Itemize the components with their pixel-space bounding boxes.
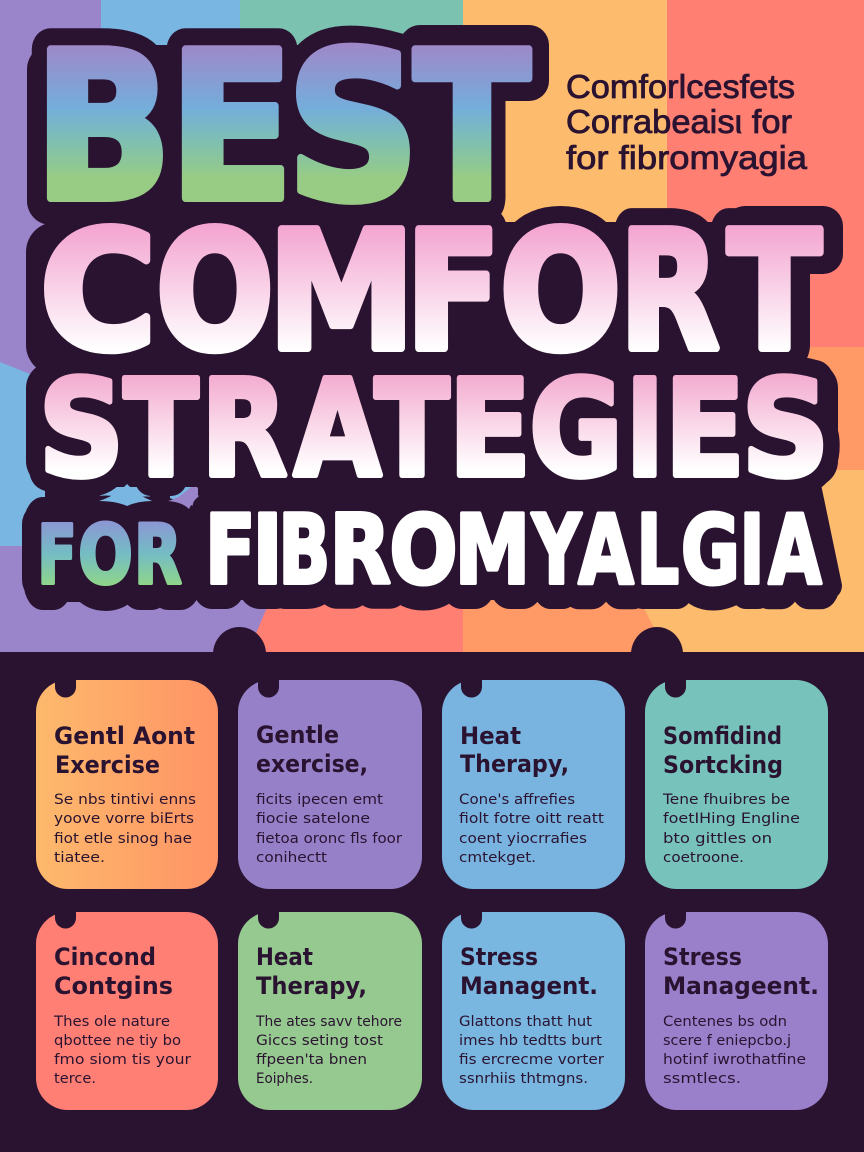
title outline backing: C [40, 198, 156, 387]
card 4: Somfidind Sortcking: Somfidind [663, 722, 782, 750]
subtitle: Comforlcesfets [566, 68, 795, 105]
dark lower panel [0, 627, 864, 1152]
card 4: Somfidind Sortcking [645, 677, 828, 889]
background colour blocks [0, 0, 864, 660]
card 8: Stress Manageent: Manageent. [663, 972, 819, 1000]
title outline backing: R [329, 496, 391, 606]
card 7: Stress Managent: Managent. [460, 972, 598, 1000]
title: STRATEGIES [39, 353, 829, 507]
title: COMFORT: O [156, 198, 274, 387]
card 6: Heat Therapy: Heat [256, 943, 313, 971]
title outline backing: E [448, 353, 531, 507]
title: FIBROMYALGIA: G [681, 496, 740, 606]
card 5: Cincond Contgins: qbottee ne tiy bo [54, 1033, 181, 1049]
title: STRATEGIES: R [201, 353, 287, 507]
card 4: Somfidind Sortcking: foetIHing Engline [663, 811, 800, 827]
title outline backing: Y [531, 496, 582, 606]
card 5: Cincond Contgins: Cincond [54, 943, 156, 971]
title outline backing: G [529, 353, 623, 507]
card 2: Gentle exercise: fiocie satelone [256, 811, 370, 827]
title outline backing: O [390, 496, 458, 606]
title outline backing: L [637, 496, 679, 606]
title outline backing: A [578, 496, 634, 606]
subtitle [566, 68, 808, 176]
card 5: Cincond Contgins: Thes ole nature [53, 1014, 170, 1030]
title outline backing: T [124, 353, 198, 507]
title: BEST: S [286, 10, 420, 247]
card 6: Heat Therapy [238, 909, 422, 1110]
card 1: Gentl Front Exercise [36, 677, 218, 889]
card 2: Gentle exercise: conihectt [256, 850, 327, 866]
card 5: Cincond Contgins: fmo siom tis your [54, 1052, 191, 1068]
card 7: Stress Managent: ssnrhiis thtmgns. [459, 1071, 588, 1087]
title: STRATEGIES: G [529, 353, 623, 507]
title outline backing: F [205, 496, 256, 606]
title: STRATEGIES: S [742, 353, 829, 507]
title: FOR: F [38, 509, 77, 603]
card 2: Gentle exercise: Gentle [256, 721, 339, 749]
title outline backing: E [169, 10, 294, 247]
title: COMFORT: M [268, 198, 415, 387]
card 7: Stress Managent [442, 909, 625, 1110]
card 4: Somfidind Sortcking: Sortcking [663, 751, 783, 779]
title outline backing: R [201, 353, 287, 507]
card 3: Heat Therapy: Cone's affrefies [459, 792, 575, 808]
card 2: Gentle exercise: ficits ipecen emt [256, 792, 383, 808]
title outline backing: B [278, 496, 330, 606]
card 8: Stress Manageent: Stress [663, 943, 742, 971]
card 8: Stress Manageent: Centenes bs odn [663, 1014, 787, 1030]
title: FIBROMYALGIA: A [578, 496, 634, 606]
title outline backing: T [375, 353, 449, 507]
title outline backing: S [39, 353, 124, 507]
title outline backing: I [626, 353, 664, 507]
card 7: Stress Managent: fis ercrecme vorter [459, 1052, 604, 1068]
title outline backing: G [681, 496, 740, 606]
title: FIBROMYALGIA [205, 496, 822, 606]
title: FIBROMYALGIA: Y [531, 496, 582, 606]
title outline backing: B [34, 10, 172, 247]
title: COMFORT: R [620, 198, 719, 387]
title: STRATEGIES: E [665, 353, 745, 507]
card 1: Gentl Front Exercise: yoove vorre biErts [54, 811, 194, 827]
title: COMFORT [40, 198, 821, 387]
title: FIBROMYALGIA: F [205, 496, 256, 606]
title outline backing: O [156, 198, 274, 387]
title outline backing: I [252, 496, 283, 606]
card 5: Cincond Contgins [36, 909, 218, 1110]
title: FIBROMYALGIA: R [329, 496, 391, 606]
title outline backing: S [286, 10, 420, 247]
title: FOR: O [78, 509, 133, 603]
card 5: Cincond Contgins: terce. [54, 1071, 96, 1087]
card 4: Somfidind Sortcking: coetroone. [663, 850, 744, 866]
title outline backing: R [620, 198, 719, 387]
title: FOR [38, 509, 182, 603]
card 3: Heat Therapy: fiolt fotre oitt reatt [459, 811, 604, 827]
card 6: Heat Therapy: Therapy, [256, 972, 367, 1000]
card 3: Heat Therapy: Heat [460, 722, 521, 750]
card 4: Somfidind Sortcking: bto gittles on [663, 831, 772, 847]
title: FIBROMYALGIA: I [740, 496, 764, 606]
card 1: Gentl Front Exercise: fiot etle sinog hae [54, 831, 192, 847]
card 7: Stress Managent: imes hb tedtts burt [459, 1033, 602, 1049]
title outline backing [22, 10, 843, 606]
card 8: Stress Manageent: scere f eniepcbo.j [663, 1033, 791, 1049]
title outline backing: M [268, 198, 415, 387]
card 1: Gentl Front Exercise: tiatee. [54, 850, 105, 866]
title: COMFORT: F [406, 198, 501, 387]
card 1: Gentl Front Exercise: Gentl Aont [54, 722, 195, 750]
card 7: Stress Managent: Glattons thatt hut [459, 1014, 592, 1030]
title: FIBROMYALGIA: I [252, 496, 283, 606]
card 2: Gentle exercise: fietoa oronc fls foor [256, 831, 402, 847]
title outline backing: O [78, 509, 133, 603]
title outline backing: A [768, 496, 822, 606]
card 8: Stress Manageent: hotinf iwrothatfine [663, 1052, 806, 1068]
card 6: Heat Therapy: Giccs seting tost [256, 1033, 383, 1049]
card 8: Stress Manageent [645, 909, 828, 1110]
card 2: Gentle exercise [238, 677, 422, 889]
title outline backing: F [38, 509, 77, 603]
title: BEST: E [169, 10, 294, 247]
title: FIBROMYALGIA: L [637, 496, 679, 606]
title: BEST: T [414, 10, 530, 247]
card 1: Gentl Front Exercise: Exercise [55, 751, 160, 779]
title: STRATEGIES: T [124, 353, 198, 507]
card 4: Somfidind Sortcking: Tene fhuibres be [662, 792, 790, 808]
subtitle: Corrabeaisι for [566, 103, 792, 140]
card 1: Gentl Front Exercise: Se nbs tintivi enns [54, 792, 196, 808]
title: FIBROMYALGIA: A [768, 496, 822, 606]
title outline backing: R [134, 509, 182, 603]
card 6: Heat Therapy: ffpeen'ta bnen [256, 1052, 367, 1068]
title: COMFORT: C [40, 198, 156, 387]
card 2: Gentle exercise: exercise, [256, 750, 368, 778]
title outline backing: E [665, 353, 745, 507]
title outline backing: T [414, 10, 530, 247]
title: COMFORT: T [728, 198, 821, 387]
title outline backing: I [740, 496, 764, 606]
card 3: Heat Therapy [442, 677, 625, 889]
title: STRATEGIES: T [375, 353, 449, 507]
title: STRATEGIES: I [626, 353, 664, 507]
title: FIBROMYALGIA: O [390, 496, 458, 606]
card 3: Heat Therapy: coent yiocrrafies [459, 831, 587, 847]
title outline backing: T [728, 198, 821, 387]
card 6: Heat Therapy: The ates savv tehore [255, 1014, 402, 1030]
title: STRATEGIES: A [294, 353, 381, 507]
title outline backing: O [500, 198, 621, 387]
title: BEST: B [34, 10, 172, 247]
title: STRATEGIES: E [448, 353, 531, 507]
title: FOR: R [134, 509, 182, 603]
title: COMFORT: O [500, 198, 621, 387]
title: FIBROMYALGIA: M [455, 496, 530, 606]
title outline backing: F [406, 198, 501, 387]
card 8: Stress Manageent: ssmtlecs. [663, 1071, 741, 1087]
title: FIBROMYALGIA: B [278, 496, 330, 606]
title outline backing: M [455, 496, 530, 606]
title outline backing: S [742, 353, 829, 507]
title: BEST [34, 10, 530, 247]
card 3: Heat Therapy: cmtekget. [459, 850, 536, 866]
card 7: Stress Managent: Stress [460, 943, 538, 971]
title outline backing: A [294, 353, 381, 507]
card 5: Cincond Contgins: Contgins [54, 972, 173, 1000]
title: STRATEGIES: S [39, 353, 124, 507]
card 6: Heat Therapy: Eoiphes. [256, 1071, 313, 1087]
subtitle: for fibromyagia [566, 139, 808, 176]
card 3: Heat Therapy: Therapy, [460, 750, 569, 778]
